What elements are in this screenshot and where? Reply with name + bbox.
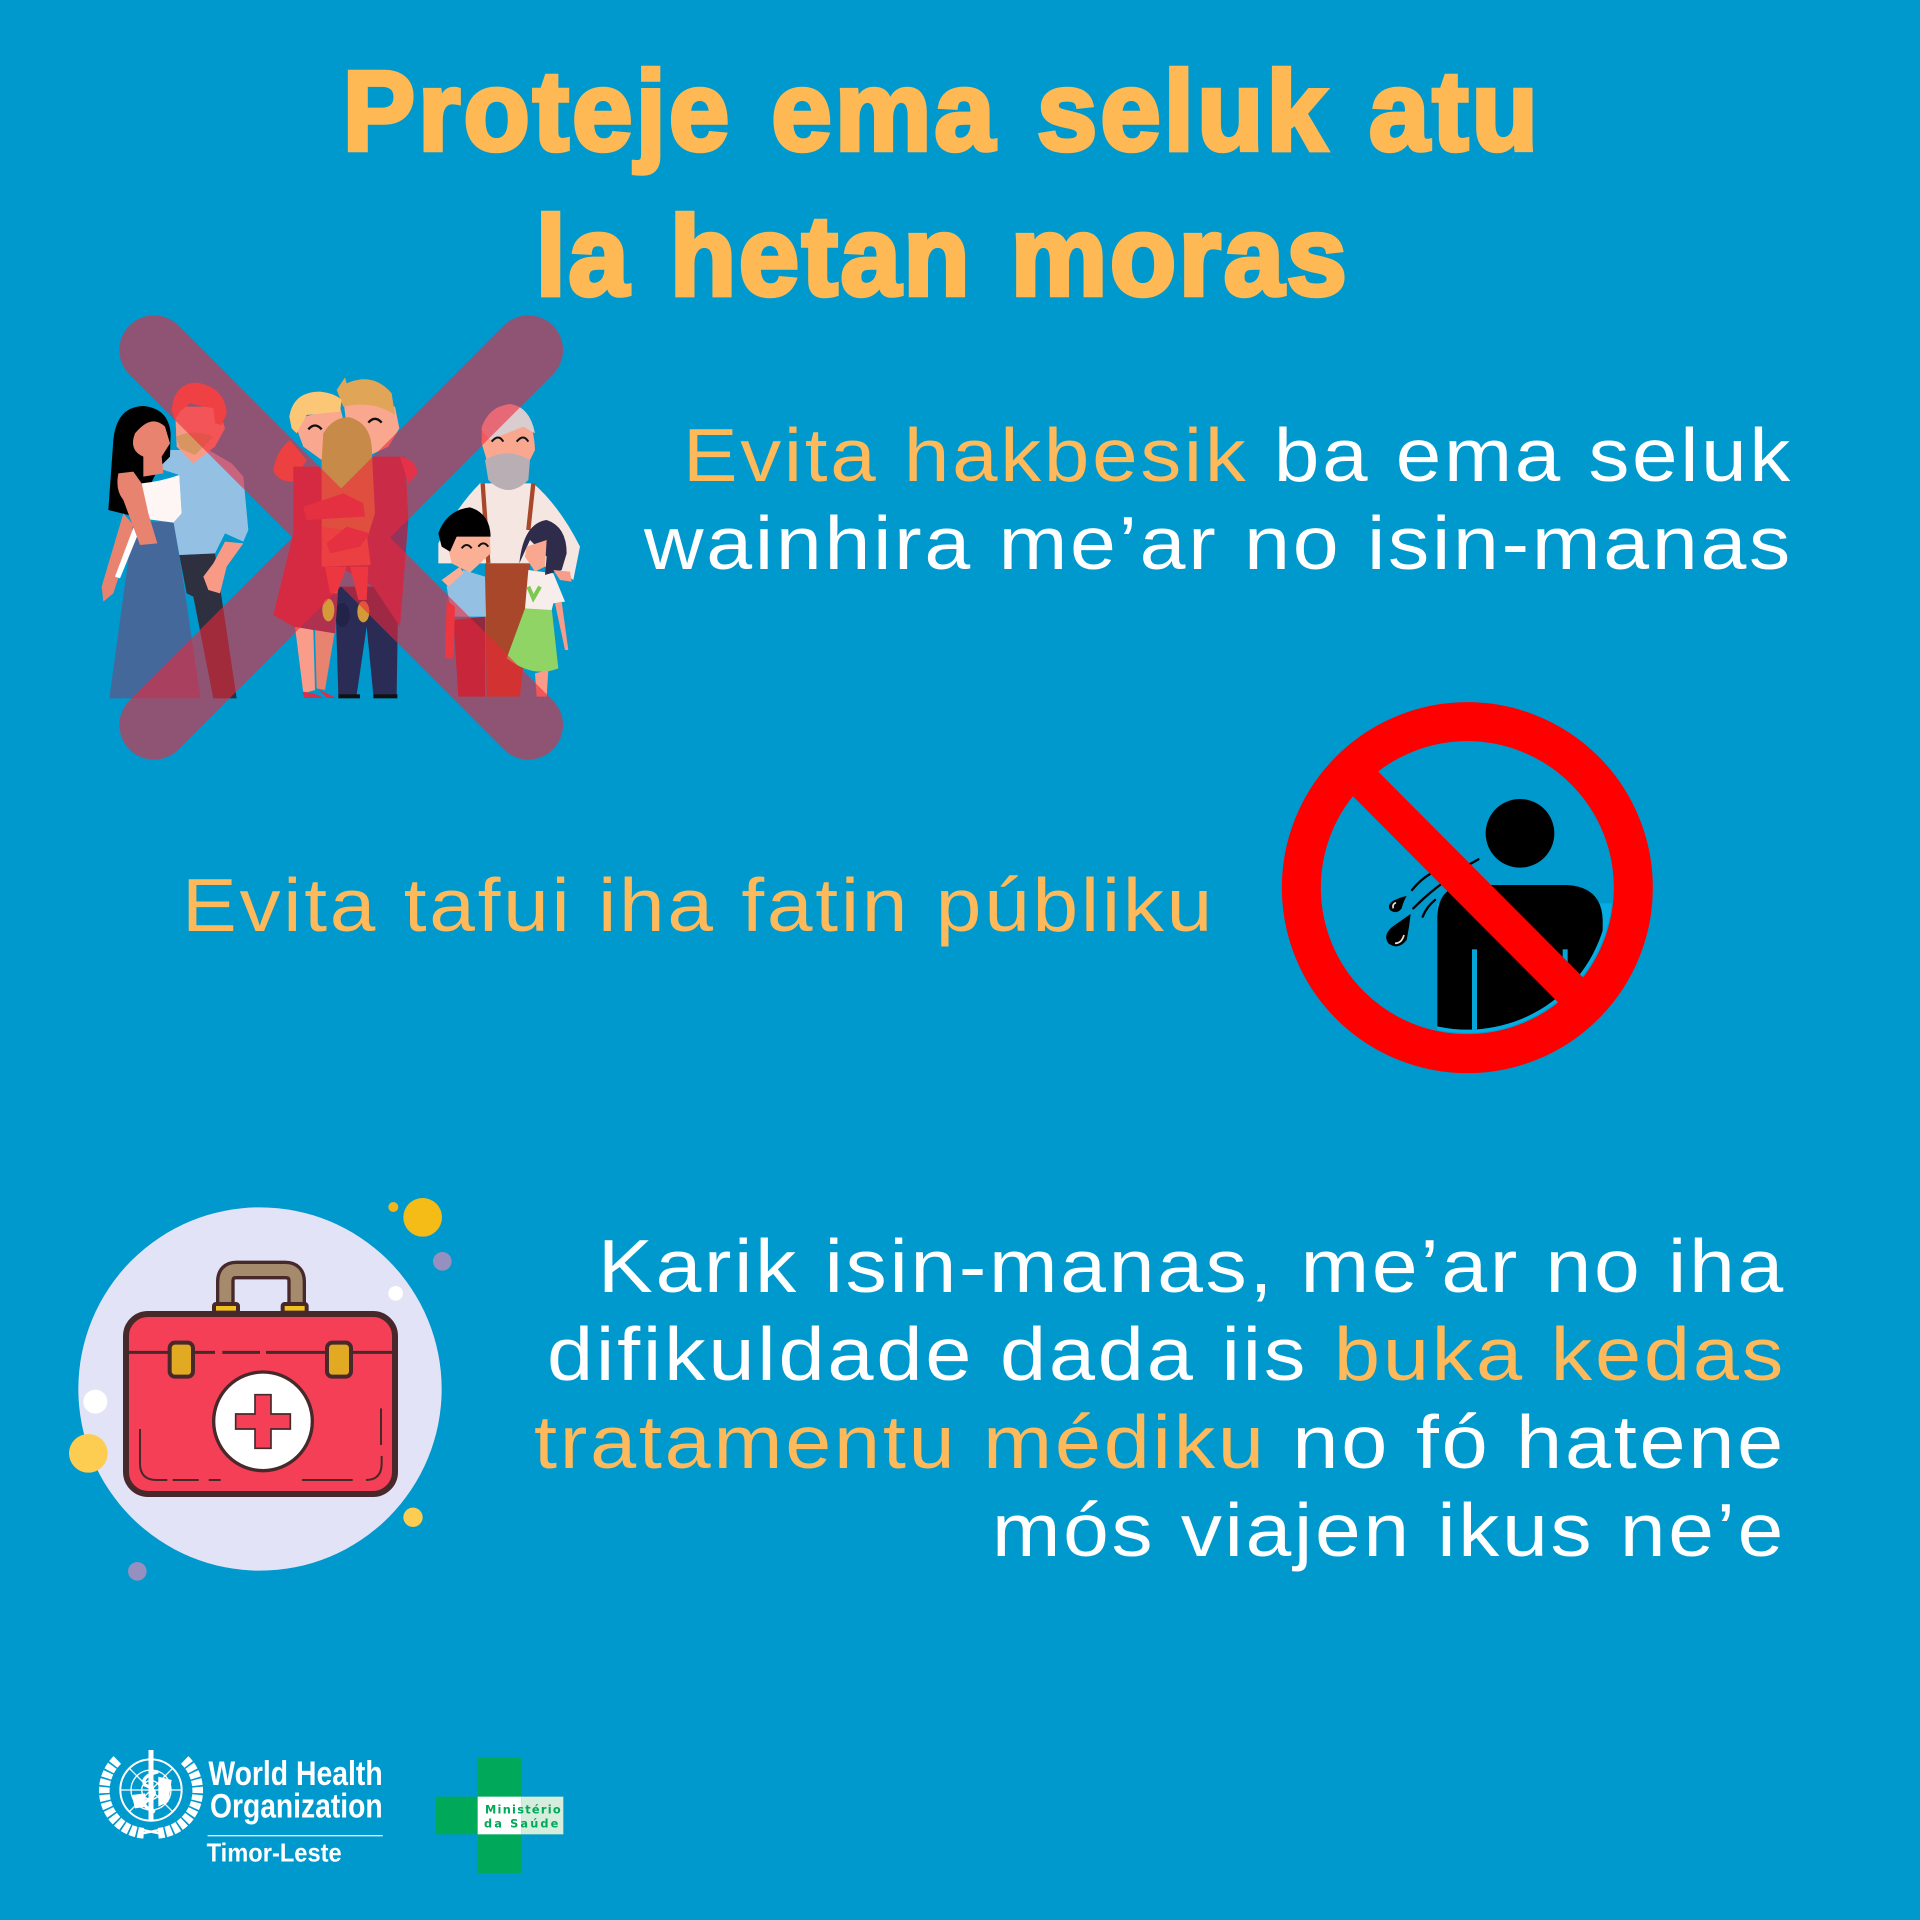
text: seek medical care <box>534 1224 1786 1572</box>
WHO wordmark: Timor-Leste <box>207 1838 342 1868</box>
title: la hetan moras <box>536 194 1347 319</box>
title: Proteje ema seluk atu <box>343 49 1538 174</box>
logo: Ministério da Saúde <box>436 1758 563 1873</box>
icon: no spitting sign <box>1301 722 1633 1057</box>
WHO wordmark <box>207 1755 383 1868</box>
logo: Ministério da Saúde: Ministério <box>485 1802 561 1816</box>
text: avoid close contact <box>643 413 1793 585</box>
title <box>343 49 1538 319</box>
red cross-out mark <box>154 350 528 725</box>
WHO wordmark: Organization <box>210 1787 383 1825</box>
hugging couple with child <box>273 377 417 698</box>
logo: Ministério da Saúde: da Saúde <box>484 1816 559 1830</box>
text: seek medical care: difikuldade dada iis buka kedas <box>547 1312 1786 1396</box>
left couple <box>102 383 248 698</box>
WHO emblem <box>104 1750 198 1834</box>
text: seek medical care: mós viajen ikus ne’e <box>992 1488 1786 1572</box>
icon: first aid kit <box>69 1198 452 1581</box>
case body <box>126 1314 395 1494</box>
text: avoid spitting in public: Evita tafui iha fatin públiku <box>182 863 1215 947</box>
medical cross badge <box>214 1372 312 1471</box>
figure silhouette <box>1437 885 1603 1030</box>
text: avoid close contact: Evita hakbesik ba ema seluk <box>683 413 1793 497</box>
icon: crossed-out family group <box>102 350 580 725</box>
text: avoid close contact: wainhira me’ar no isin-manas <box>643 501 1793 585</box>
text: seek medical care: tratamentu médiku no fó hatene <box>534 1400 1786 1484</box>
spit droplets <box>1386 859 1478 946</box>
grandfather with children <box>438 404 580 697</box>
prohibition ring and slash <box>1301 722 1633 1054</box>
case handle <box>214 1270 307 1313</box>
logo: World Health Organization Timor-Leste <box>104 1750 383 1868</box>
decorative dots <box>69 1198 452 1581</box>
text: seek medical care: Karik isin-manas, me’ar no iha <box>598 1224 1786 1308</box>
WHO wordmark: World Health <box>208 1755 383 1793</box>
